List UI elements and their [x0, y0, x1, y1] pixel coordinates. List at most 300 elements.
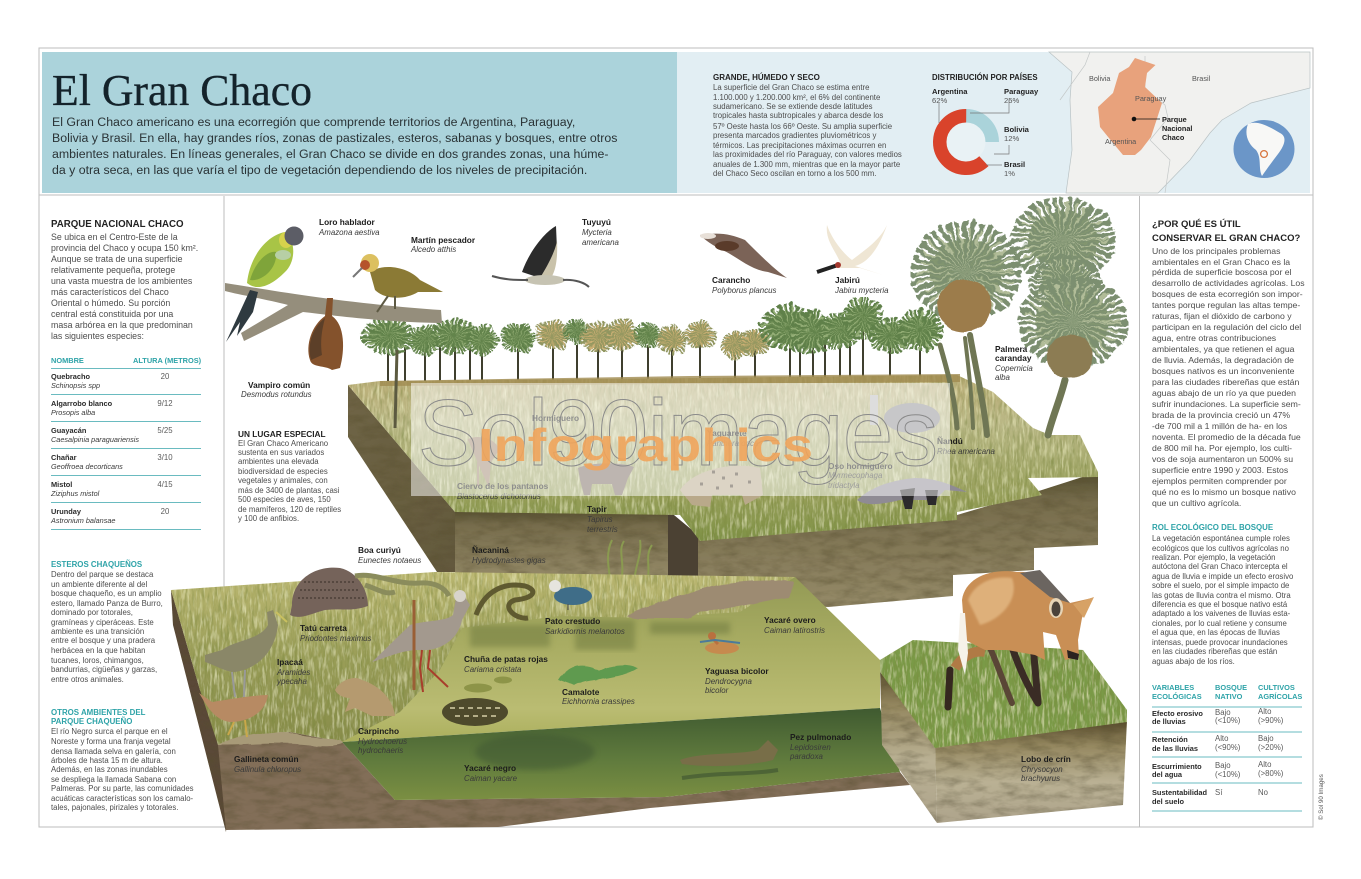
panel: ¿por qué es útil conservar?: Uno de los principales problemas [1152, 246, 1281, 256]
panel: esteros chaqueños: gramíneas y ciperáceas. Este [51, 618, 154, 627]
panel: otros ambientes del parque chaqueño: acuáticas características son los camalo- [51, 794, 194, 803]
table: variables ecológicas: (>80%) [1258, 769, 1284, 778]
text block: un lugar especial: de mamíferos, 120 de reptiles [238, 505, 341, 514]
animal: ipacaá [205, 610, 287, 697]
text block: un lugar especial: y 100 de anfibios. [238, 514, 299, 523]
panel: rol ecológico del bosque [1152, 523, 1294, 666]
text block: grande, húmedo y seco [713, 73, 902, 178]
label: gallineta común: Gallinula chloropus [234, 765, 301, 774]
label: jabirú: Jabiru mycteria [834, 286, 889, 295]
label: yaguareté [707, 428, 759, 448]
panel: rol ecológico del bosque: ecológicos que los cultivos agrícolas no [1152, 544, 1290, 553]
panel: ¿por qué es útil conservar?: de lluvia. Además, la degradación de [1152, 355, 1294, 365]
label: tuyuyú: Mycteria [582, 228, 612, 237]
label: pez pulmonado: paradoxa [789, 752, 824, 761]
label: palmera caranday: caranday [995, 353, 1032, 363]
table: species and heights: Schinopsis spp [51, 381, 100, 390]
panel: otros ambientes del parque chaqueño: tales, pajonales, pirizales y totorales. [51, 803, 178, 812]
panel: esteros chaqueños: entre otros animales. [51, 675, 124, 684]
label: yaguasa bicolor [705, 666, 769, 695]
label: tapir [587, 504, 618, 534]
panel: ¿por qué es útil conservar?: ambientales, ya que retienen el agua [1152, 344, 1295, 354]
lily pads [464, 676, 512, 692]
front soil face [455, 510, 672, 578]
animal: boa curiyú [355, 575, 449, 596]
panel: ¿por qué es útil conservar?: ambientales en el Gran Chaco es la [1152, 257, 1290, 267]
panel: otros ambientes del parque chaqueño [51, 708, 194, 812]
text block: Se ubica en el Centro-Este de la [51, 232, 178, 242]
intro paragraph: Bolivia y Brasil. En ella, hay grandes ríos, zonas de pastizales, esteros, sabanas y bosques, entre otros [52, 131, 617, 145]
panel: esteros chaqueños: herbácea en la que habitan [51, 646, 146, 655]
animal: lobo de crín [948, 570, 1094, 707]
grass top [880, 640, 1127, 748]
soil bed [218, 732, 910, 830]
panel: ¿por qué es útil conservar?: agua, entre otras contribuciones [1152, 333, 1277, 343]
soil step shadow [668, 510, 698, 582]
animal: yacaré negro [475, 734, 595, 770]
heading: PARQUE NACIONAL CHACO [51, 219, 184, 230]
animal: tapir [578, 463, 634, 495]
label: camalote: Eichhornia crassipes [562, 697, 635, 706]
panel: rol ecológico del bosque: aguas abajo de los ríos. [1152, 657, 1235, 666]
text block: grande, húmedo y seco: 57º Oeste hasta los 66º Oeste. Su amplia superficie [713, 122, 892, 131]
text block: grande, húmedo y seco: anuales de 1.300 mm, mientras que en la mayor parte [713, 160, 900, 169]
watermark: Sol90images [418, 380, 938, 485]
panel: esteros chaqueños [51, 560, 163, 684]
text block: más característicos del Chaco [51, 287, 169, 297]
label: yaguareté: Panthera onca [707, 439, 759, 448]
chart: distribución por países donut [929, 73, 1039, 179]
animal: ciervo [468, 438, 498, 486]
table: species and heights: Guayacán [51, 426, 87, 435]
grass surface [348, 375, 1098, 541]
label: ciervo de los pantanos [457, 481, 549, 501]
table: variables ecológicas: CULTIVOS [1258, 683, 1295, 692]
map: location of Gran Chaco: Chaco [1162, 133, 1185, 142]
label: ñacaniná: Ñacaniná [472, 545, 509, 555]
text block: una vasta muestra de los ambientes [51, 276, 193, 286]
label: pez pulmonado: Pez pulmonado [790, 732, 851, 742]
table: species and heights: Quebracho [51, 372, 90, 381]
illustration: lower wetland block [171, 568, 910, 832]
chart: distribución por países donut: DISTRIBUCIÓN POR PAÍSES [932, 73, 1038, 82]
animal: vampiro común [308, 298, 343, 370]
label: ñacaniná [472, 545, 546, 565]
label: ipacaá: ypecaha [276, 677, 307, 686]
label: yacaré overo: Yacaré overo [764, 615, 816, 625]
panel: ¿por qué es útil conservar?: superficie entre 1990 y 2003. Estos [1152, 465, 1289, 475]
text block: relativamente pequeña, protege [51, 265, 175, 275]
chart: distribución por países donut: 62% [932, 96, 947, 105]
text block: grande, húmedo y seco: La superficie del Gran Chaco se estima entre [713, 83, 869, 92]
text block: grande, húmedo y seco: 1.100.000 y 1.200.000 km², el 6% del continente [713, 93, 880, 102]
panel: ¿por qué es útil conservar?: bosques nativos es un inconveniente [1152, 366, 1295, 376]
label: carancho [712, 275, 777, 295]
left soil face [348, 385, 470, 572]
panel: ¿por qué es útil conservar?: ejemplos permiten comprender por [1152, 476, 1287, 486]
soil left face [880, 667, 937, 823]
label: ñandú: Rhea americana [937, 447, 996, 456]
table: species and heights: Urunday [51, 507, 82, 516]
panel: rol ecológico del bosque: intensas, puede provocar inundaciones [1152, 638, 1288, 647]
text block: provincia del Chaco y ocupa 150 km². [51, 243, 198, 253]
panel: rol ecológico del bosque: cionales, por lo cual retiene y consume [1152, 619, 1287, 628]
text block: grande, húmedo y seco: GRANDE, HÚMEDO Y SECO [713, 73, 820, 82]
table: variables ecológicas: del suelo [1152, 797, 1185, 806]
label: loro hablador: Amazona aestiva [318, 228, 380, 237]
label: tuyuyú [582, 217, 619, 247]
label: vampiro común: Vampiro común [248, 380, 310, 390]
panel: ¿por qué es útil conservar?: participan en la regulación del ciclo del [1152, 322, 1301, 332]
panel: otros ambientes del parque chaqueño: El río Negro surca el parque en el [51, 727, 168, 736]
label: lobo de crín: Lobo de crín [1021, 754, 1071, 764]
animal: yaguasa bicolor [700, 632, 740, 654]
table: variables ecológicas: (>20%) [1258, 743, 1284, 752]
panel: ¿por qué es útil conservar?: vos de soja aumentaron un 500% su [1152, 454, 1293, 464]
table: variables ecológicas: Bajo [1215, 761, 1231, 770]
animal: jabirú [817, 225, 887, 275]
map: location of Gran Chaco: Paraguay [1135, 94, 1167, 103]
panel: ¿por qué es útil conservar?: ¿POR QUÉ ES ÚTIL [1152, 218, 1241, 230]
text block: Oriental o húmedo. Su porción [51, 298, 170, 308]
species labels [234, 217, 1071, 783]
table: species and heights: Astronium balansae [50, 516, 116, 525]
text block: un lugar especial: sustenta en sus variados [238, 448, 324, 457]
tree in front left [395, 350, 397, 428]
label: yacaré negro: Caiman yacare [464, 774, 518, 783]
label: lobo de crín: brachyurus [1021, 774, 1060, 783]
table: variables ecológicas [1152, 683, 1302, 811]
panel: rol ecológico del bosque: diferencia es que el bosque nativo está [1152, 600, 1288, 609]
panel: esteros chaqueños: entre el bosque y una pradera [51, 636, 156, 645]
panel: ¿por qué es útil conservar?: que un cultivo agrícola. [1152, 498, 1241, 508]
label: tapir: Tapirus [587, 515, 613, 524]
panel: ¿por qué es útil conservar?: aguas abajo de un río ya que pueden [1152, 388, 1296, 398]
distant palm row [369, 303, 937, 420]
panel: parque nacional chaco [50, 219, 202, 530]
label: ipacaá [276, 657, 310, 686]
label: ñacaniná: Hydrodynastes gigas [472, 556, 546, 565]
label: yaguasa bicolor: Yaguasa bicolor [705, 666, 769, 676]
panel: rol ecológico del bosque: realizan. Por ejemplo, la vegetación [1152, 553, 1276, 562]
label: tapir: terrestris [587, 525, 618, 534]
panel: esteros chaqueños: bandurrias, cigüeñas y garzas, [51, 665, 157, 674]
table: variables ecológicas: NATIVO [1215, 692, 1243, 701]
map: location of Gran Chaco: Bolivia [1089, 74, 1111, 83]
text block: grande, húmedo y seco: del Chaco Seco oscilan en torno a los 500 mm. [713, 169, 876, 178]
table: species and heights: Prosopis alba [51, 408, 95, 417]
table: species and heights: 4/15 [157, 480, 173, 489]
panel: rol ecológico del bosque: en las ciudades ribereñas que están [1152, 647, 1277, 656]
panel: rol ecológico del bosque: ROL ECOLÓGICO DEL BOSQUE [1152, 523, 1273, 532]
horizon band [380, 374, 960, 386]
label: jabirú: Jabirú [835, 275, 860, 285]
label: yacaré overo: Caiman latirostris [764, 626, 825, 635]
panel: data and map strip [677, 52, 1310, 193]
label: pato crestudo: Sarkidiornis melanotos [545, 627, 625, 636]
text block: grande, húmedo y seco: sudamericano. Se se extiende desde latitudes [713, 102, 873, 111]
palmera caranday group [929, 211, 1110, 435]
label: ciervo de los pantanos: Ciervo de los pantanos [457, 481, 549, 491]
animal: yacaré overo [628, 580, 793, 618]
label: boa curiyú: Boa curiyú [358, 545, 401, 555]
animal: martín pescador [353, 254, 443, 312]
icon: globe locator [1234, 120, 1294, 178]
label: martín pescador: Martín pescador [411, 235, 476, 245]
plant on soil [608, 540, 652, 578]
label: tatú carreta [300, 623, 372, 643]
animal: ñacaniná [476, 585, 533, 618]
water surface [342, 577, 880, 742]
label: vampiro común: Desmodus rotundus [241, 390, 312, 399]
label: boa curiyú: Eunectes notaeus [358, 556, 421, 565]
table: species and heights: 3/10 [157, 453, 173, 462]
table: variables ecológicas: Sustentabilidad [1152, 788, 1208, 797]
label: camalote: Camalote [562, 687, 600, 697]
panel: rol ecológico del bosque: La vegetación espontánea cumple roles [1152, 534, 1290, 543]
table: species and heights [50, 356, 202, 530]
label: pato crestudo [545, 616, 625, 636]
label: tapir: Tapir [587, 504, 607, 514]
text block: grande, húmedo y seco: las proximidades del río Paraguay, con valores medios [713, 150, 902, 159]
chart: distribución por países donut: 1% [1004, 169, 1015, 178]
panel: ¿por qué es útil conservar?: pérdida de superficie boscosa por el [1152, 267, 1292, 277]
table: variables ecológicas: Efecto erosivo [1152, 709, 1203, 718]
panel: otros ambientes del parque chaqueño: Noreste y forma una franja vegetal [51, 737, 171, 746]
panel: esteros chaqueños: dominado por totorales, [51, 608, 133, 617]
intro paragraph: El Gran Chaco americano es una ecorregión que comprende territorios de Argentina, Paraguay, [52, 115, 575, 129]
panel: rol ecológico del bosque: las gotas de lluvia contra el mismo. Otra [1152, 591, 1291, 600]
label: tatú carreta: Priodontes maximus [300, 634, 372, 643]
map: location of Gran Chaco: Argentina [1105, 137, 1137, 146]
label: tuyuyú: Tuyuyú [582, 217, 611, 227]
animal: tuyuyú [492, 226, 589, 287]
label: pez pulmonado: Lepidosiren [790, 743, 831, 752]
panel: esteros chaqueños: bosque chaqueño, es un amplio [51, 589, 162, 598]
table: variables ecológicas: Escurrimiento [1152, 762, 1202, 771]
table: species and heights: Chañar [51, 453, 77, 462]
table: variables ecológicas: Alto [1258, 707, 1272, 716]
panel: esteros chaqueños: ambiente es una transición [51, 627, 144, 636]
table: variables ecológicas: Bajo [1215, 708, 1231, 717]
table: species and heights: Geoffroea decorticans [51, 462, 123, 471]
label: palmera caranday: alba [995, 373, 1011, 382]
label: tatú carreta: Tatú carreta [300, 623, 347, 633]
animal: pato crestudo [549, 580, 592, 610]
text block: un lugar especial [238, 429, 341, 523]
label: carpincho [358, 726, 407, 755]
animal: carancho [700, 233, 787, 278]
text block: masa arbórea en la que predominan [51, 320, 193, 330]
label: boa curiyú [358, 545, 421, 565]
table: variables ecológicas: BOSQUE [1215, 683, 1247, 692]
label: yaguareté: Yaguareté [707, 428, 747, 438]
animal: tatú carreta [290, 568, 368, 617]
label: loro hablador [318, 217, 380, 237]
panel: ¿por qué es útil conservar?: qué no es lo mismo un bosque nativo [1152, 487, 1296, 497]
chart: distribución por países donut: 25% [1004, 96, 1019, 105]
table: variables ecológicas: (>90%) [1258, 716, 1284, 725]
grass bank [171, 572, 830, 745]
reed [412, 600, 416, 690]
label: chuña de patas rojas: Chuña de patas rojas [464, 654, 548, 664]
panel: otros ambientes del parque chaqueño: OTROS AMBIENTES DEL [51, 708, 146, 717]
illustration: birds and bat [225, 225, 887, 370]
panel: rol ecológico del bosque: adaptado a los vaivenes de lluvias esta- [1152, 609, 1291, 618]
label: palmera caranday [995, 344, 1033, 382]
text block: grande, húmedo y seco: térmicos. Las precipitaciones máximas ocurren en [713, 141, 886, 150]
credit: © Sol 90 Images [1318, 774, 1325, 820]
text block: Aunque se trata de una superficie [51, 254, 183, 264]
panel: ¿por qué es útil conservar? [1152, 218, 1305, 508]
label: ciervo de los pantanos: Blastocerus dichotomus [457, 492, 541, 501]
label: tuyuyú: americana [582, 238, 619, 247]
text block: las siguientes especies: [51, 331, 144, 341]
text block: un lugar especial: vegetales y animales, con [238, 476, 328, 485]
label: oso hormiguero: tridactyla [828, 481, 860, 490]
panel: ¿por qué es útil conservar?: -de 700 mil a 1 millón de ha- en los [1152, 421, 1288, 431]
table: variables ecológicas: Bajo [1258, 734, 1274, 743]
label: yaguasa bicolor: bicolor [705, 686, 729, 695]
table: variables ecológicas: ECOLÓGICAS [1152, 692, 1202, 701]
watermark: Infographics [478, 419, 813, 471]
label: chuña de patas rojas: Cariama cristata [464, 665, 522, 674]
text block: un lugar especial: 500 especies de aves, 150 [238, 495, 331, 504]
branch [225, 283, 442, 341]
label: ipacaá: Ipacaá [277, 657, 303, 667]
table: variables ecológicas: (<90%) [1215, 743, 1241, 752]
animal: carpincho [335, 678, 395, 716]
soil right face [935, 720, 1127, 823]
animal: tortuga [442, 698, 508, 726]
label: chuña de patas rojas [464, 654, 548, 674]
table: species and heights: 20 [161, 507, 170, 516]
label: ñandú [937, 436, 996, 456]
panel: esteros chaqueños: un ambiente diferente al del [51, 580, 147, 589]
label: ñandú: Ñandú [937, 436, 963, 446]
panel: ¿por qué es útil conservar?: brada de la provincia creció un 47% [1152, 410, 1290, 420]
table: variables ecológicas: del agua [1152, 770, 1183, 779]
label: martín pescador: Alcedo atthis [410, 245, 456, 254]
label: ipacaá: Aramides [276, 668, 310, 677]
label: gallineta común [234, 754, 301, 774]
panel: title banner [42, 52, 677, 193]
panel: ¿por qué es útil conservar?: sufrir inundaciones. La superficie sem- [1152, 399, 1301, 409]
table: variables ecológicas: AGRÍCOLAS [1258, 692, 1302, 701]
animal: pez pulmonado [680, 740, 778, 778]
label: yacaré overo [764, 615, 825, 635]
table: variables ecológicas: Sí [1215, 788, 1223, 797]
label: carancho: Polyborus plancus [712, 286, 777, 295]
label: oso hormiguero: Myrmecophaga [828, 471, 883, 480]
table: species and heights: 9/12 [157, 399, 173, 408]
text block: un lugar especial: El Gran Chaco Americano [238, 439, 329, 448]
table: variables ecológicas: No [1258, 788, 1269, 797]
text block: grande, húmedo y seco: presenta marcados gradientes pluviométricos y [713, 131, 876, 140]
label: martín pescador [410, 235, 476, 254]
label: gallineta común: Gallineta común [234, 754, 299, 764]
table: variables ecológicas: de lluvias [1152, 717, 1186, 726]
panel: rol ecológico del bosque: agua de lluvia e impide un efecto erosivo [1152, 572, 1294, 581]
table: species and heights: NOMBRE [51, 356, 84, 365]
label: loro hablador: Loro hablador [319, 217, 376, 227]
table: species and heights: ALTURA (METROS) [133, 356, 202, 365]
label: pez pulmonado [789, 732, 851, 761]
camalote [558, 664, 638, 686]
left soil face [171, 590, 232, 832]
label: yacaré negro: Yacaré negro [464, 763, 516, 773]
intro paragraph: da y otra seca, en las que varía el tipo de vegetación dependiendo de los niveles de precipitación. [52, 163, 587, 177]
panel: ¿por qué es útil conservar?: raturas, fijan el dióxido de carbono y [1152, 311, 1292, 321]
water reflections [470, 620, 730, 650]
table: variables ecológicas: Retención [1152, 735, 1188, 744]
table: species and heights: 20 [161, 372, 170, 381]
panel: ¿por qué es útil conservar?: de 800 mil ha. Por ejemplo, los culti- [1152, 443, 1292, 453]
label: oso hormiguero [828, 461, 893, 490]
panel: ¿por qué es útil conservar?: CONSERVAR EL GRAN CHACO? [1152, 233, 1301, 244]
animal: chuña de patas rojas [372, 590, 470, 692]
table: variables ecológicas: VARIABLES [1152, 683, 1194, 692]
animal: ñandú [870, 395, 940, 433]
foreground bank mud [218, 733, 342, 746]
text block: un lugar especial: más de 3400 de plantas, casi [238, 486, 340, 495]
label: lobo de crín: Chrysocyon [1021, 765, 1063, 774]
animal: loro hablador [226, 226, 304, 342]
label: yaguasa bicolor: Dendrocygna [705, 677, 753, 686]
chart: distribución por países donut: 12% [1004, 134, 1019, 143]
animal: oso hormiguero [857, 478, 967, 509]
panel: rol ecológico del bosque: el agua que, en las épocas de lluvias [1152, 628, 1280, 637]
panel: otros ambientes del parque chaqueño: se despliega la llamada Sabana con [51, 775, 176, 784]
animal: yaguareté [680, 466, 763, 507]
table: variables ecológicas: (<10%) [1215, 716, 1241, 725]
text block: un lugar especial: UN LUGAR ESPECIAL [238, 429, 326, 439]
table: species and heights: Ziziphus mistol [50, 489, 100, 498]
animal: gallineta común [199, 693, 268, 737]
map: location of Gran Chaco: Parque [1162, 115, 1187, 124]
chart: distribución por países donut: Argentina [932, 87, 968, 96]
label: yacaré negro [464, 763, 518, 783]
chart: distribución por países donut: Paraguay [1004, 87, 1039, 96]
table: variables ecológicas: de las lluvias [1152, 744, 1198, 753]
text block: un lugar especial: biodiversidad de especies [238, 467, 328, 476]
table: variables ecológicas: Alto [1258, 760, 1272, 769]
chart: distribución por países donut: Bolivia [1004, 125, 1030, 134]
intro paragraph: ambientes naturales. En líneas generales, el Gran Chaco se divide en dos grandes zonas, una húme- [52, 147, 608, 161]
label: lobo de crín [1021, 754, 1071, 783]
panel: esteros chaqueños: Dentro del parque se destaca [51, 570, 154, 579]
table: species and heights: Algarrobo blanco [51, 399, 113, 408]
label: carpincho: hydrochaeris [358, 746, 403, 755]
panel: otros ambientes del parque chaqueño: PARQUE CHAQUEÑO [51, 717, 132, 726]
table: species and heights: Mistol [51, 480, 72, 489]
panel: ¿por qué es útil conservar?: bosques de esta ecorregión son impor- [1152, 289, 1303, 299]
panel: ¿por qué es útil conservar?: noventa. El promedio de la década fue [1152, 432, 1301, 442]
label: hormiguero: Hormiguero [532, 413, 579, 423]
panel: otros ambientes del parque chaqueño: Además, en las zonas inundables [51, 765, 168, 774]
label: carpincho: Carpincho [358, 726, 399, 736]
illustration: maned wolf soil block [880, 570, 1127, 823]
label: palmera caranday: Palmera [995, 344, 1028, 354]
panel: ¿por qué es útil conservar?: desarrollo de actividades agrícolas. Los [1152, 278, 1305, 288]
panel: otros ambientes del parque chaqueño: árboles de hasta 15 m de altura. [51, 756, 163, 765]
label: vampiro común [241, 380, 312, 399]
label: carpincho: Hydrochoerus [358, 737, 407, 746]
chart: distribución por países donut: Brasil [1004, 160, 1025, 169]
label: pato crestudo: Pato crestudo [545, 616, 600, 626]
title: El Gran Chaco [52, 66, 312, 115]
panel: esteros chaqueños: ESTEROS CHAQUEÑOS [51, 560, 142, 569]
